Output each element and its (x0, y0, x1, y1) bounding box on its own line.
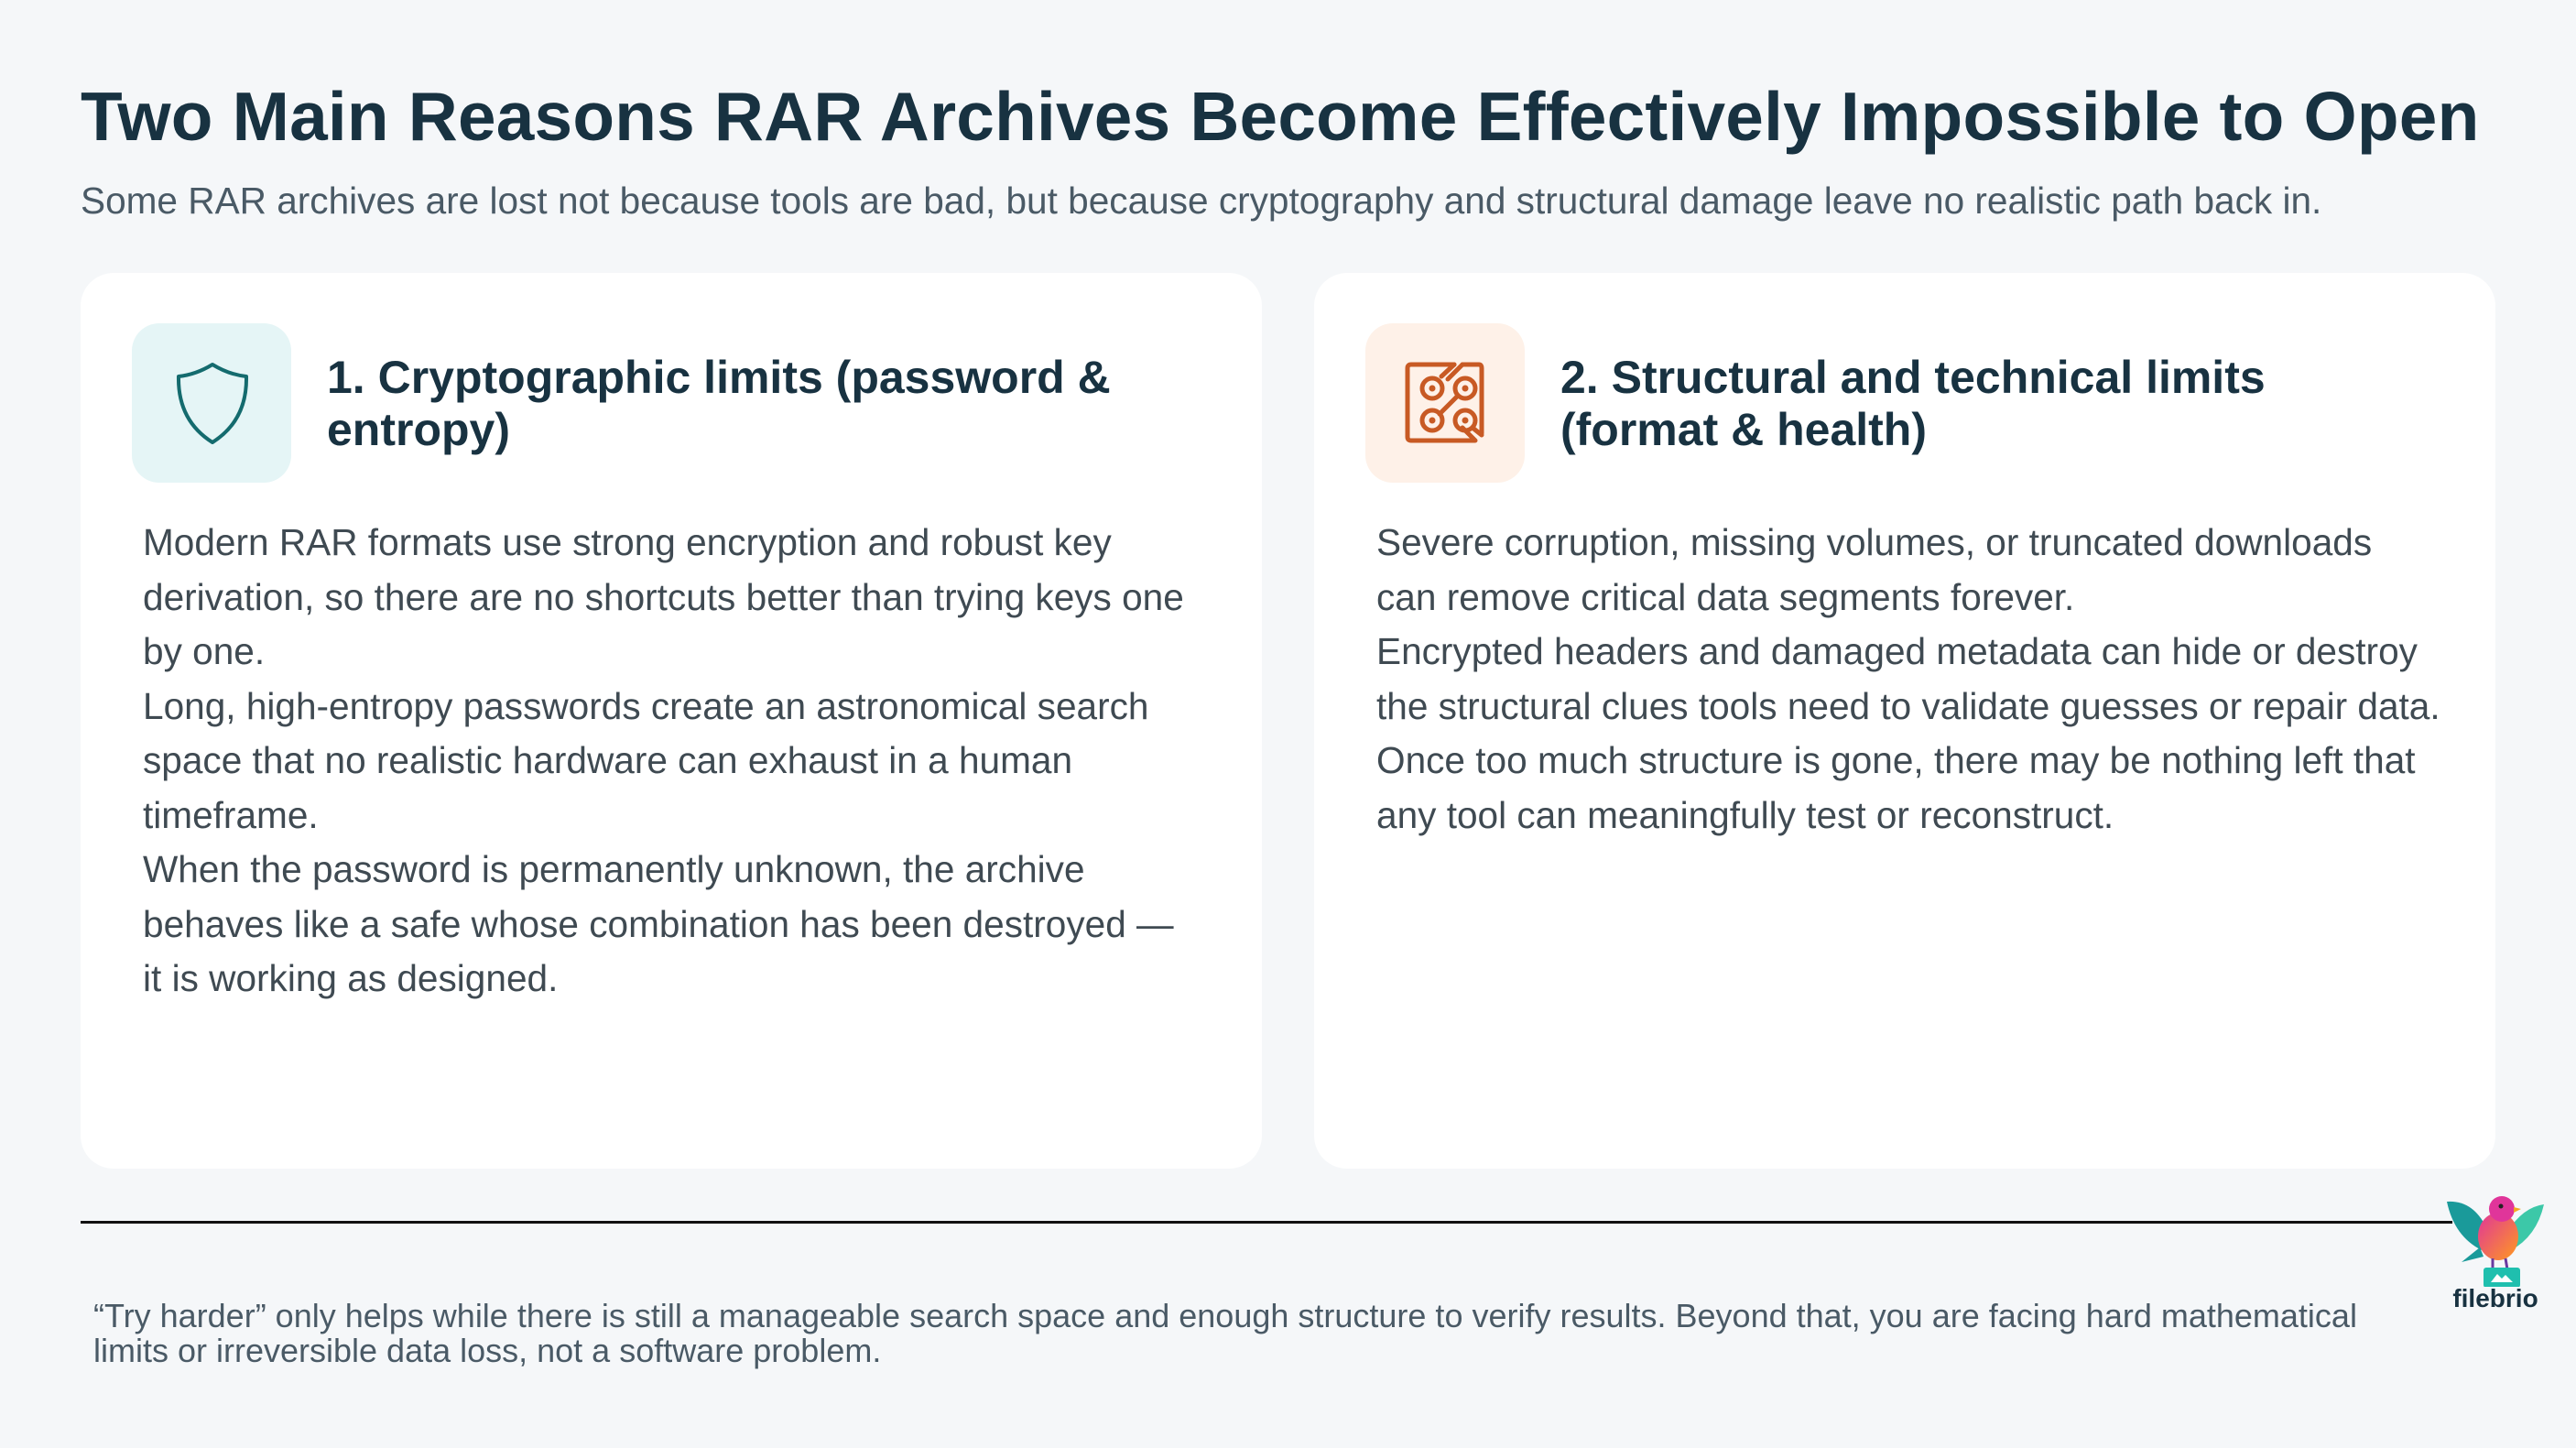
logo: filebrio (2447, 1196, 2544, 1312)
body text: Long, high-entropy passwords create an astronomical search (143, 685, 1148, 727)
logo: filebrio: filebrio (2452, 1284, 2538, 1312)
title: Two Main Reasons RAR Archives Become Effectively Impossible to Open (81, 78, 2480, 155)
body text: Modern RAR formats use strong encryption and robust key (143, 521, 1112, 563)
heading: 2. Structural and technical limits (format & health) (1560, 352, 2266, 455)
body text: can remove critical data segments forever. (1376, 575, 2074, 617)
subtitle: Some RAR archives are lost not because tools are bad, but because cryptography and structural damage leave no realistic path back in. (81, 180, 2321, 222)
body text: it is working as designed. (143, 957, 558, 999)
panel: structural limits (1314, 273, 2495, 1169)
body text (143, 521, 1184, 999)
body text: space that no realistic hardware can exhaust in a human (143, 739, 1072, 781)
body text: When the password is permanently unknown, the archive (143, 848, 1085, 890)
body text (1376, 521, 2440, 835)
body text: Once too much structure is gone, there may be nothing left that (1376, 739, 2416, 781)
heading: 1. Cryptographic limits (password & entropy) (327, 352, 1111, 455)
body text: the structural clues tools need to validate guesses or repair data. (1376, 685, 2440, 727)
body text: behaves like a safe whose combination has been destroyed — (143, 903, 1174, 945)
body text: Encrypted headers and damaged metadata can hide or destroy (1376, 630, 2418, 672)
icon: circuit (1365, 323, 1525, 483)
footer note: “Try harder” only helps while there is still a manageable search space and enough structure to verify results. Beyond that, you are facing hard mathematical limits or irreversible data loss, not a software problem. (93, 1297, 2357, 1369)
icon: shield (132, 323, 291, 483)
panel: cryptographic limits (81, 273, 1262, 1169)
body text: Severe corruption, missing volumes, or truncated downloads (1376, 521, 2372, 563)
body text: by one. (143, 630, 265, 672)
body text: derivation, so there are no shortcuts better than trying keys one (143, 575, 1184, 617)
body text: timeframe. (143, 793, 319, 835)
body text: any tool can meaningfully test or reconstruct. (1376, 793, 2114, 835)
